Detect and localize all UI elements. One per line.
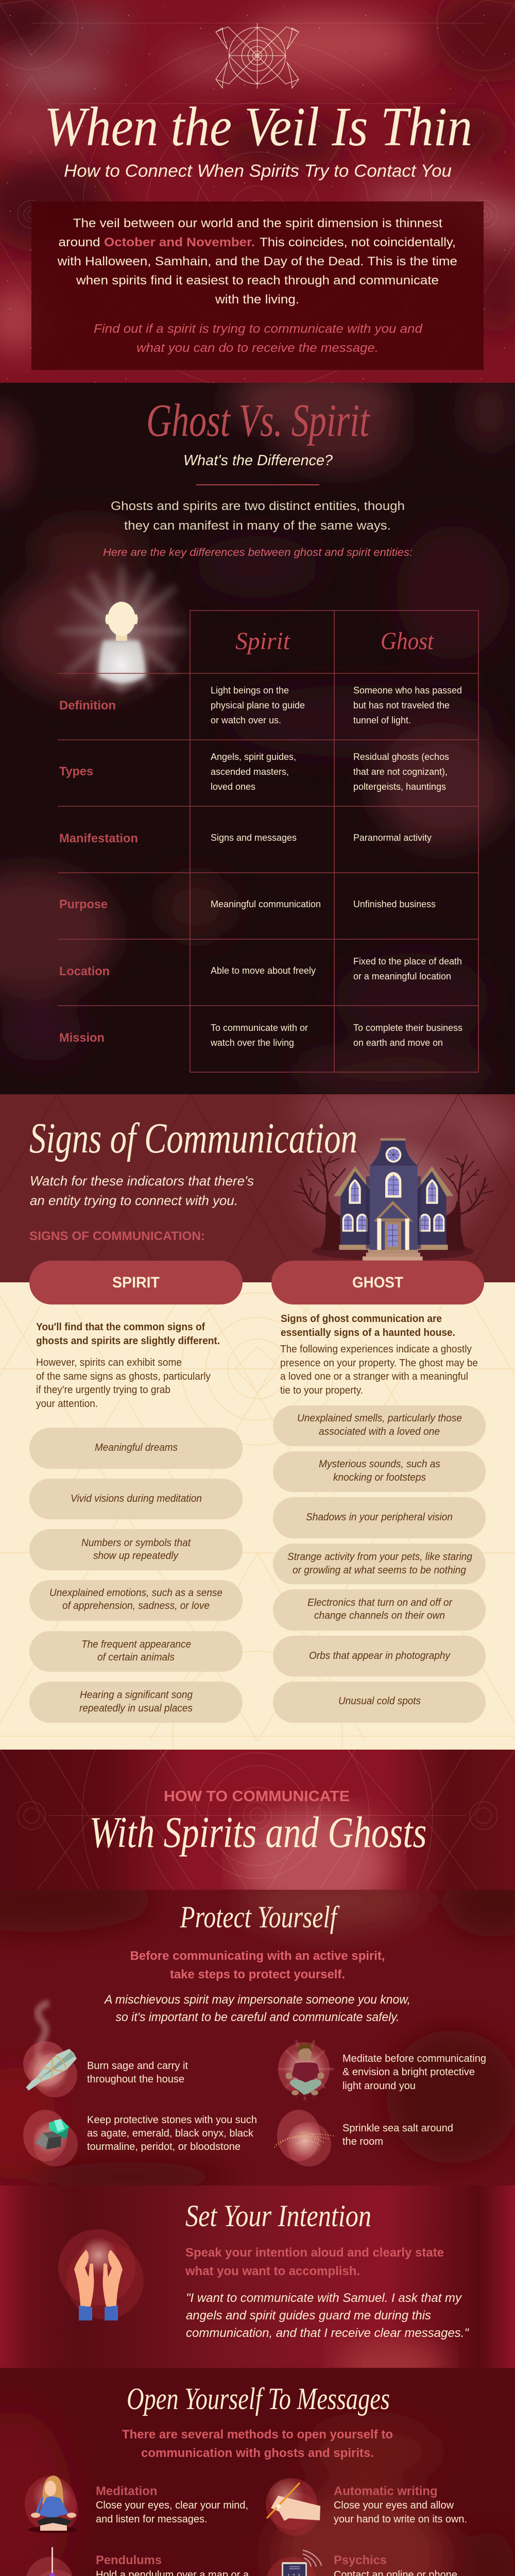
ghost signs list: Strange activity from your pets, like staring — [287, 1551, 472, 1563]
intro call to action — [94, 322, 423, 355]
section background: intro — [0, 0, 515, 383]
ghost column intro: a loved one or a stranger with a meaningful — [280, 1371, 468, 1382]
text: stones — [87, 2114, 257, 2153]
intention text — [185, 2246, 469, 2340]
text: psychics: Psychics — [334, 2553, 387, 2567]
heading: ghost vs spirit: Ghost Vs. Spirit — [146, 395, 370, 446]
row: definition: Light beings on the — [211, 685, 289, 696]
comparison table — [58, 611, 478, 1072]
divider rule — [196, 484, 319, 485]
icon: meditating woman — [25, 2476, 78, 2533]
intro text: ghost vs spirit — [103, 499, 413, 558]
ghost signs list: Electronics that turn on and off or — [307, 1597, 453, 1608]
spirit signs list: The frequent appearance — [81, 1639, 191, 1650]
icon: pendulum — [25, 2547, 78, 2576]
text: meditation: Meditation — [96, 2484, 158, 2498]
row: mission: To complete their business — [353, 1023, 462, 1033]
spirit signs list: of certain animals — [97, 1652, 175, 1663]
row: mission: To communicate with or — [211, 1023, 308, 1033]
panel: intro box — [31, 201, 484, 370]
row: types: that are not cognizant), — [353, 767, 448, 777]
text: automatic writing: Close your eyes and allow — [334, 2500, 454, 2511]
intention text: communication, and that I receive clear messages." — [186, 2326, 469, 2340]
intention text: "I want to communicate with Samuel. I ask that my — [186, 2291, 462, 2305]
heading: how to communicate — [90, 1788, 426, 1857]
row: location: Location — [59, 964, 110, 978]
intention text: angels and spirit guides guard me during this — [186, 2309, 431, 2323]
signs intro: an entity trying to connect with you. — [30, 1193, 238, 1208]
ghost column intro: Signs of ghost communication are — [281, 1313, 442, 1325]
intention text: Speak your intention aloud and clearly state — [185, 2246, 444, 2260]
intro paragraph: October and November. — [104, 235, 255, 249]
ghost signs list: associated with a loved one — [319, 1426, 440, 1437]
row: types: Types — [59, 765, 93, 778]
open yourself intro — [122, 2428, 393, 2460]
spirit column intro: ghosts and spirits are slightly different. — [36, 1335, 220, 1347]
ghost column intro — [280, 1313, 478, 1396]
spirit signs list: Numbers or symbols that — [81, 1537, 191, 1549]
ghost signs list — [273, 1405, 486, 1723]
row: types: Residual ghosts (echos — [353, 752, 449, 762]
spirit signs list — [29, 1428, 243, 1723]
spirit signs list: show up repeatedly — [93, 1550, 179, 1562]
heading: how to communicate: HOW TO COMMUNICATE — [164, 1788, 350, 1805]
intro paragraph: The veil between our world and the spirit dimension is thinnest — [73, 216, 442, 230]
row: definition: tunnel of light. — [353, 715, 411, 725]
ghost signs list: Shadows in your peripheral vision — [306, 1512, 453, 1523]
row: purpose: Unfinished business — [353, 899, 436, 909]
heading: protect yourself: Protect Yourself — [180, 1900, 340, 1934]
protect intro text: take steps to protect yourself. — [170, 1968, 345, 1981]
label: signs of communication: SIGNS OF COMMUNICATION: — [29, 1229, 205, 1243]
text: meditate: light around you — [342, 2080, 416, 2092]
row: definition: Definition — [59, 699, 116, 713]
heading: signs of communication: Signs of Communication — [29, 1114, 357, 1162]
section background: set your intention — [0, 2185, 515, 2368]
text: pendulums — [96, 2553, 250, 2576]
intro call to action: what you can do to receive the message. — [136, 341, 379, 355]
spirit signs list: repeatedly in usual places — [79, 1703, 193, 1714]
intro paragraph: This coincides, not coincidentally, — [260, 235, 456, 249]
spirit signs list: Hearing a significant song — [80, 1689, 193, 1701]
text: burn sage: throughout the house — [87, 2074, 184, 2085]
icon: hand writing — [266, 2478, 320, 2536]
spirit column intro: of the same signs as ghosts, particularly — [36, 1371, 211, 1382]
ghost signs list: Orbs that appear in photography — [309, 1650, 451, 1662]
text: meditate: & envision a bright protective — [342, 2066, 475, 2078]
row: manifestation: Signs and messages — [211, 833, 297, 843]
text: meditate — [342, 2053, 486, 2092]
row: definition: Someone who has passed — [353, 685, 462, 696]
table header: ghost: Ghost — [381, 628, 434, 655]
text: automatic writing — [334, 2484, 467, 2525]
heading: open yourself to messages: Open Yourself To Messages — [127, 2382, 390, 2416]
text: stones: as agate, emerald, black onyx, black — [87, 2128, 254, 2139]
text: automatic writing: your hand to write on its own. — [334, 2514, 467, 2525]
heading: how to communicate: With Spirits and Ghosts — [90, 1807, 426, 1857]
text: burn sage: Burn sage and carry it — [87, 2060, 188, 2072]
table header: spirit: Spirit — [235, 628, 291, 655]
intro text: ghost vs spirit: Here are the key differences between ghost and spirit entities: — [103, 547, 413, 558]
intro paragraph: with the living. — [215, 293, 299, 307]
section background: signs cream — [0, 1282, 515, 1750]
row: manifestation — [59, 832, 432, 845]
text: meditation — [96, 2484, 248, 2525]
row: mission: Mission — [59, 1031, 105, 1045]
section background: signs upper — [0, 1094, 515, 1282]
icon: sea salt — [274, 2110, 334, 2166]
text: sea salt — [342, 2123, 453, 2147]
spirit signs list: Unexplained emotions, such as a sense — [49, 1587, 222, 1599]
row: mission: on earth and move on — [353, 1038, 443, 1048]
text: stones: tourmaline, peridot, or bloodstone — [87, 2141, 241, 2153]
ghost column intro: essentially signs of a haunted house. — [281, 1327, 455, 1338]
row: location — [59, 956, 462, 981]
section background: ghost vs spirit — [0, 374, 515, 1094]
row: location: Able to move about freely — [211, 965, 316, 976]
ghost signs list: Unexplained smells, particularly those — [297, 1413, 462, 1424]
icon: phone — [266, 2550, 321, 2576]
pill: ghost — [271, 1261, 484, 1304]
ghost signs list: or growling at what seems to be nothing — [293, 1565, 466, 1576]
icon: protective stones — [23, 2110, 78, 2166]
row: manifestation: Paranormal activity — [353, 833, 432, 843]
row: types: poltergeists, hauntings — [353, 782, 446, 792]
icon: burning sage — [21, 2003, 79, 2097]
ghost signs list: Unusual cold spots — [338, 1696, 421, 1707]
spirit signs list: Vivid visions during meditation — [71, 1493, 202, 1504]
row: types — [59, 752, 449, 792]
icon: meditating person — [278, 2040, 334, 2100]
icon: glowing spirit figure — [58, 567, 185, 694]
spirit signs list: of apprehension, sadness, or love — [62, 1600, 210, 1612]
text: stones: Keep protective stones with you such — [87, 2114, 257, 2126]
row: manifestation: Manifestation — [59, 832, 138, 845]
text: meditation: and listen for messages. — [96, 2514, 207, 2525]
signs intro — [30, 1173, 254, 1208]
section background: open yourself — [0, 2368, 515, 2576]
intro paragraph — [57, 216, 457, 307]
intro call to action: Find out if a spirit is trying to communicate with you and — [94, 322, 423, 336]
protect intro text: A mischievous spirit may impersonate someone you know, — [104, 1993, 410, 2007]
protect intro text: so it's important to be careful and communicate safely. — [115, 2010, 400, 2024]
protect intro text: Before communicating with an active spirit, — [130, 1949, 385, 1963]
spirit column intro: if they're urgently trying to grab — [36, 1384, 170, 1396]
ghost column intro: tie to your property. — [280, 1385, 363, 1396]
spirit column intro: your attention. — [36, 1398, 98, 1410]
subtitle: How to Connect When Spirits Try to Contact You — [64, 161, 452, 181]
pill: ghost: GHOST — [352, 1274, 403, 1291]
intro text: ghost vs spirit: Ghosts and spirits are two distinct entities, though — [111, 499, 405, 513]
ghost signs list: change channels on their own — [314, 1610, 445, 1621]
ghost column intro: presence on your property. The ghost may be — [280, 1358, 478, 1369]
intro text: ghost vs spirit: they can manifest in many of the same ways. — [124, 519, 391, 533]
open yourself intro: There are several methods to open yourself to — [122, 2428, 393, 2442]
intention text: what you want to accomplish. — [185, 2264, 360, 2278]
heading: set your intention: Set Your Intention — [185, 2199, 371, 2233]
text: pendulums: Pendulums — [96, 2553, 162, 2567]
text: meditation: Close your eyes, clear your mind, — [96, 2500, 248, 2511]
section background: how to communicate header — [0, 1750, 515, 1890]
text: meditate: Meditate before communicating — [342, 2053, 486, 2064]
spirit column intro: You'll find that the common signs of — [36, 1321, 205, 1333]
text: psychics — [333, 2553, 477, 2576]
text: sea salt: Sprinkle sea salt around — [342, 2123, 453, 2134]
text: burn sage — [87, 2060, 188, 2085]
row: types: Angels, spirit guides, — [211, 752, 296, 762]
pill: spirit: SPIRIT — [112, 1274, 160, 1291]
row: definition: physical plane to guide — [211, 700, 305, 710]
ghost column intro: The following experiences indicate a ghostly — [280, 1344, 472, 1355]
spirit signs list: Meaningful dreams — [95, 1442, 178, 1453]
intro paragraph: when spirits find it easiest to reach through and communicate — [76, 274, 439, 287]
row: mission — [59, 1023, 462, 1048]
icon: raised hands — [58, 2229, 144, 2320]
text: automatic writing: Automatic writing — [334, 2484, 438, 2498]
icon: haunted house — [294, 1133, 493, 1261]
intro paragraph: around — [59, 235, 100, 249]
spirit column intro — [36, 1321, 220, 1410]
decorative geometry: intro — [0, 0, 515, 389]
icon: veil emblem — [216, 23, 299, 89]
open yourself intro: communication with ghosts and spirits. — [141, 2446, 374, 2460]
row: location: Fixed to the place of death — [353, 956, 462, 967]
ghost signs list: knocking or footsteps — [333, 1472, 426, 1483]
spirit column intro: However, spirits can exhibit some — [36, 1357, 182, 1368]
signs intro: Watch for these indicators that there's — [30, 1173, 254, 1189]
protect intro text — [104, 1949, 410, 2024]
row: purpose: Purpose — [59, 897, 108, 911]
subheading: What's the Difference? — [183, 452, 333, 469]
row: types: loved ones — [211, 782, 255, 792]
pill: spirit — [29, 1261, 243, 1304]
row: definition: but has not traveled the — [353, 700, 450, 710]
intro paragraph: with Halloween, Samhain, and the Day of the Dead. This is the time — [57, 255, 457, 268]
row: mission: watch over the living — [210, 1038, 294, 1048]
row: purpose: Meaningful communication — [211, 899, 321, 909]
text: sea salt: the room — [342, 2136, 383, 2147]
row: purpose — [59, 897, 436, 911]
title: When the Veil Is Thin — [44, 96, 472, 158]
row: location: or a meaningful location — [353, 971, 451, 981]
ghost signs list: Mysterious sounds, such as — [319, 1459, 440, 1470]
row: definition — [59, 685, 462, 725]
row: definition: or watch over us. — [211, 715, 281, 725]
section background: protect yourself — [0, 1865, 515, 2192]
row: types: ascended masters, — [211, 767, 289, 777]
